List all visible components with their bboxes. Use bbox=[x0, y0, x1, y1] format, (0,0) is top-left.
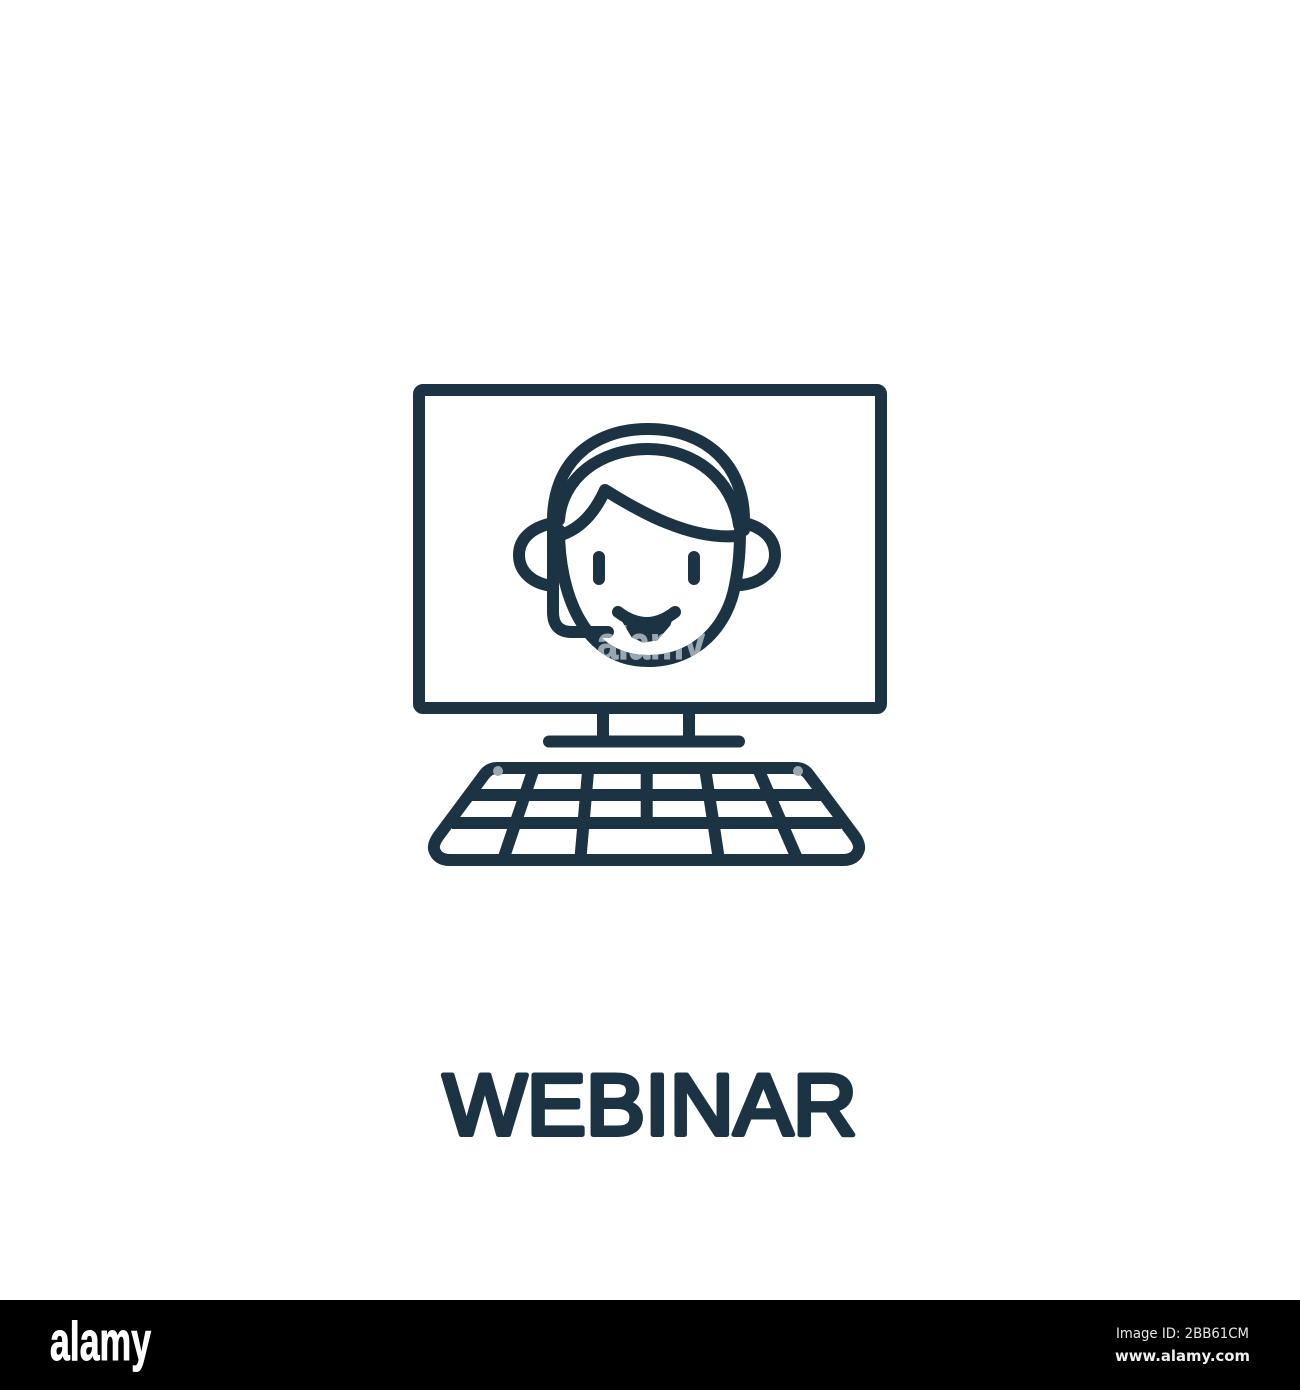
infographic canvas bbox=[0, 384, 1300, 1390]
watermark fragment over face: alamy bbox=[597, 617, 705, 669]
watermark specks on keyboard bbox=[493, 766, 803, 776]
title: WEBINAR bbox=[443, 1058, 857, 1154]
icon: keyboard bbox=[434, 768, 859, 860]
website: www.alamy.com bbox=[1115, 1347, 1250, 1365]
icon: monitor bbox=[419, 390, 881, 742]
footer bar bbox=[0, 1300, 1300, 1390]
image id: Image ID: 2BB61CM bbox=[1116, 1326, 1249, 1342]
icon: webinar computer bbox=[419, 390, 881, 860]
icon: presenter with headset bbox=[519, 429, 775, 661]
footer logo: alamy bbox=[50, 1310, 151, 1372]
